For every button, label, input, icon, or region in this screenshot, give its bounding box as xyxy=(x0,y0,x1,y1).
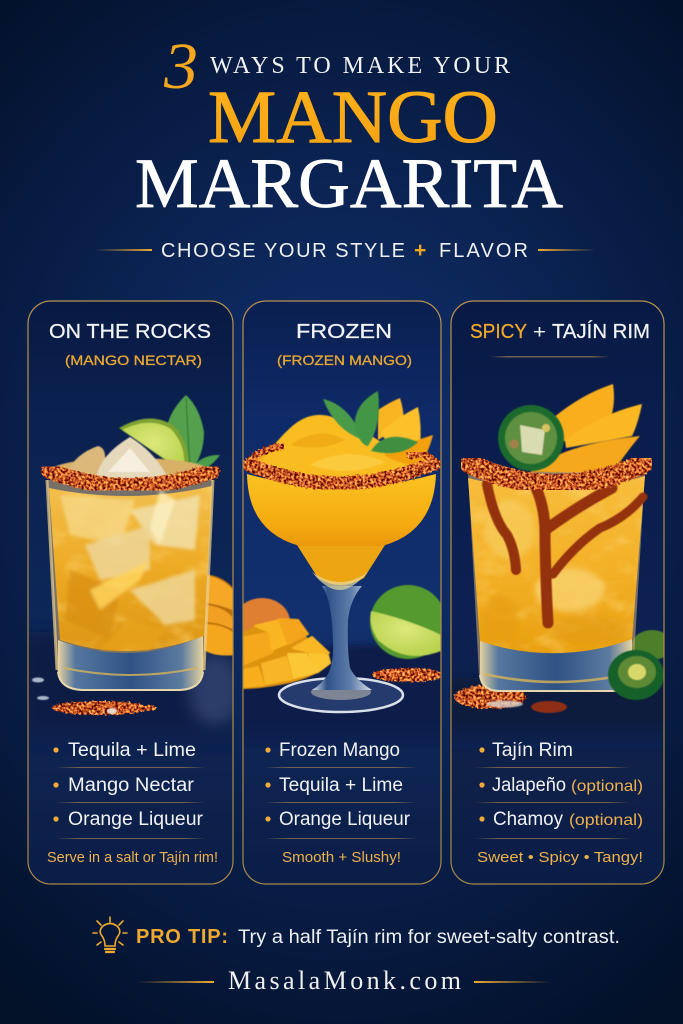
mango slices behind glass xyxy=(204,574,235,655)
title block xyxy=(135,30,563,223)
subtitle with rules xyxy=(95,239,595,262)
panel border xyxy=(28,301,233,884)
ice cubes above rim xyxy=(52,437,208,482)
chamoy drizzle xyxy=(487,484,643,623)
mango garnish xyxy=(378,398,433,466)
website footer: MasalaMonk.com xyxy=(228,966,461,995)
mint garnish xyxy=(323,391,418,453)
ingredient list: Chamoy xyxy=(493,809,563,830)
panel border xyxy=(243,301,441,884)
spiced rim xyxy=(250,446,433,483)
title word: mango: MANGO xyxy=(208,76,498,159)
ingredient list: Tequila + Lime xyxy=(279,775,403,796)
cut mango xyxy=(234,598,331,689)
texture note: Smooth + Slushy! xyxy=(282,849,401,866)
script numeral 3: 3 xyxy=(163,30,198,103)
ingredient list: Mango Nectar xyxy=(68,775,195,796)
ingredient list: Tajín Rim xyxy=(492,740,573,761)
pro tip xyxy=(93,917,620,952)
ingredient list xyxy=(475,740,643,839)
heading: ON THE ROCKS xyxy=(49,321,211,343)
panel: frozen xyxy=(93,301,674,995)
chili flakes xyxy=(372,668,444,682)
lime wedge and mint xyxy=(119,395,220,476)
rocks glass xyxy=(47,480,213,691)
panel: on the rocks xyxy=(18,301,243,884)
heading: SPICY xyxy=(470,321,527,343)
heading: FROZEN xyxy=(296,321,392,343)
icon: light bulb xyxy=(93,917,127,952)
ingredient list xyxy=(265,740,417,839)
tumbler xyxy=(468,472,645,692)
jalapeno ring xyxy=(608,650,664,700)
flavor note: Sweet • Spicy • Tangy! xyxy=(477,849,643,866)
ingredient list xyxy=(53,740,206,839)
subheading: (FROZEN MANGO) xyxy=(277,352,412,368)
heading rule xyxy=(490,356,610,358)
slush xyxy=(253,415,429,484)
ingredient list: Jalapeño xyxy=(492,775,566,796)
heading: + xyxy=(533,322,546,343)
lower bowl xyxy=(297,545,385,585)
serving note: Serve in a salt or Tajín rim! xyxy=(47,849,218,866)
margarita glass xyxy=(243,301,441,884)
table surface xyxy=(244,642,440,732)
whole jalapeno xyxy=(632,630,664,660)
upper bowl xyxy=(247,474,436,546)
title line: ways to make your: WAYS TO MAKE YOUR xyxy=(210,53,510,79)
heading: TAJÍN RIM xyxy=(552,320,650,343)
spiced rim xyxy=(49,471,212,486)
mango slices xyxy=(530,384,642,474)
subtitle with rules: CHOOSE YOUR STYLE xyxy=(161,240,405,262)
ingredient list: (optional) xyxy=(571,778,643,795)
spilled chili flakes xyxy=(32,678,157,715)
table surface xyxy=(452,678,664,726)
lime xyxy=(370,585,446,659)
ingredient list: Orange Liqueur xyxy=(279,809,411,830)
panel: spicy xyxy=(441,301,674,884)
title word: margarita: MARGARITA xyxy=(135,145,563,223)
jalapeno slice xyxy=(498,405,564,471)
glass stem xyxy=(312,586,372,690)
subtitle with rules: FLAVOR xyxy=(439,240,528,262)
ingredient list: (optional) xyxy=(569,812,643,829)
ingredient list: Frozen Mango xyxy=(279,740,400,761)
subheading: (MANGO NECTAR) xyxy=(65,352,202,368)
panel border xyxy=(451,301,664,884)
spiced rim xyxy=(470,464,643,484)
table surface xyxy=(28,630,232,730)
ingredient list: Tequila + Lime xyxy=(68,740,196,761)
glass foot xyxy=(279,678,403,712)
heading xyxy=(470,320,650,343)
subtitle with rules: + xyxy=(414,239,426,262)
tip label: PRO TIP: xyxy=(136,926,228,948)
tip text: Try a half Tajín rim for sweet-salty contrast. xyxy=(238,927,620,948)
spilled chili and salt xyxy=(454,685,567,713)
ingredient list: Orange Liqueur xyxy=(68,809,204,830)
